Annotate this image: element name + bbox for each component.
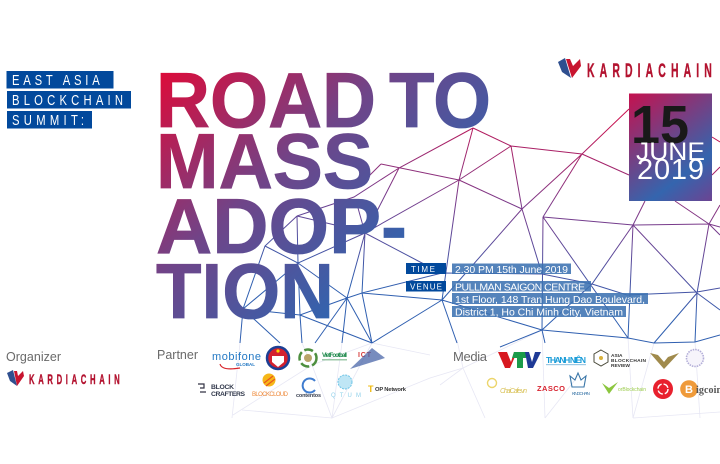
logo: zasco: ZASCO xyxy=(537,384,565,393)
logo: blockcloud: BLOCKCLOUD xyxy=(252,392,289,398)
title: ROAD xyxy=(156,56,376,144)
logo: lavender seal xyxy=(686,350,704,366)
title xyxy=(156,56,491,335)
time row: 2.30 PM 15th June 2019 xyxy=(455,264,568,276)
partner heading: Partner xyxy=(157,348,198,362)
logo: block crafters: BLOCK xyxy=(211,384,234,391)
logo: mobifone xyxy=(212,351,261,369)
media logos xyxy=(488,350,720,399)
logo: asia blockchain review xyxy=(594,350,647,369)
event details xyxy=(406,263,648,318)
date box: JUNE xyxy=(636,138,705,166)
logo: vietfootball xyxy=(300,350,347,366)
logo: red circle xyxy=(653,379,673,399)
logo: vforblockchain xyxy=(602,382,646,394)
logo: top network: T xyxy=(368,384,374,394)
media heading: Media xyxy=(453,349,488,364)
title: MASS xyxy=(156,117,373,205)
logo: thanh nien: THANH NIÊN xyxy=(546,354,586,365)
logo: vietfootball: VietFootball xyxy=(322,352,347,359)
logo: ict: ICT xyxy=(358,352,372,359)
organizer xyxy=(6,350,120,388)
title: ADOP- xyxy=(156,182,407,270)
venue row: VENUE xyxy=(410,282,442,292)
venue row: PULLMAN SAIGON CENTRE xyxy=(455,282,585,294)
logo: asia blockchain review: BLOCKCHAIN xyxy=(611,358,647,364)
logo: mobifone: mobifone xyxy=(212,351,261,363)
logo: contentos xyxy=(296,378,321,399)
logo: top network xyxy=(368,384,407,394)
logo: blockcloud xyxy=(252,374,289,398)
logo: qtum xyxy=(331,375,361,399)
logo: chaicafe: ChaiCafe.vn xyxy=(500,388,527,395)
logo: asia blockchain review: REVIEW xyxy=(611,363,630,369)
summit label: BLOCKCHAIN xyxy=(12,91,123,108)
time row: TIME xyxy=(411,265,435,274)
logo: contentos: contentos xyxy=(296,393,321,399)
logo: kingchain: KINGCHAIN xyxy=(572,391,591,397)
title: TION xyxy=(156,247,334,335)
logo: bigcoin xyxy=(680,380,720,398)
date box xyxy=(629,94,712,201)
logo: bigcoin: B xyxy=(685,384,693,396)
organizer: Organizer xyxy=(6,350,61,364)
logo: block crafters xyxy=(198,384,245,398)
title: TO xyxy=(389,56,491,144)
venue row: District 1, Ho Chi Minh City, Vietnam xyxy=(455,306,623,318)
venue row: 1st Floor, 148 Tran Hung Dao Boulevard, xyxy=(455,294,645,306)
logo: chaicafe xyxy=(488,378,527,395)
logo: kardiachain top: KARDIACHAIN xyxy=(587,61,712,82)
date box: 15 xyxy=(631,95,689,155)
logo: kingchain xyxy=(570,373,591,397)
logo: vtv xyxy=(498,352,541,368)
summit label xyxy=(6,71,131,128)
logo: vforblockchain: orBlockchain xyxy=(618,387,646,393)
organizer: KARDIACHAIN xyxy=(29,373,120,388)
logo: football federation xyxy=(267,347,289,369)
logo: mobifone: GLOBAL xyxy=(236,362,255,367)
logo: qtum: QTUM xyxy=(331,393,361,399)
logo: top network: OP Network xyxy=(375,387,407,393)
summit label: EAST ASIA xyxy=(12,71,100,88)
logo: asia blockchain review: ASIA xyxy=(611,353,623,359)
date box: 2019 xyxy=(637,154,704,186)
network mesh xyxy=(232,109,720,418)
logo: block crafters: CRAFTERS xyxy=(211,391,245,398)
summit label: SUMMIT: xyxy=(12,111,84,128)
logo: gold v xyxy=(650,353,679,369)
partner logos xyxy=(198,347,407,399)
venue row xyxy=(406,281,648,318)
time row xyxy=(406,263,571,276)
logo: ict xyxy=(350,348,385,369)
